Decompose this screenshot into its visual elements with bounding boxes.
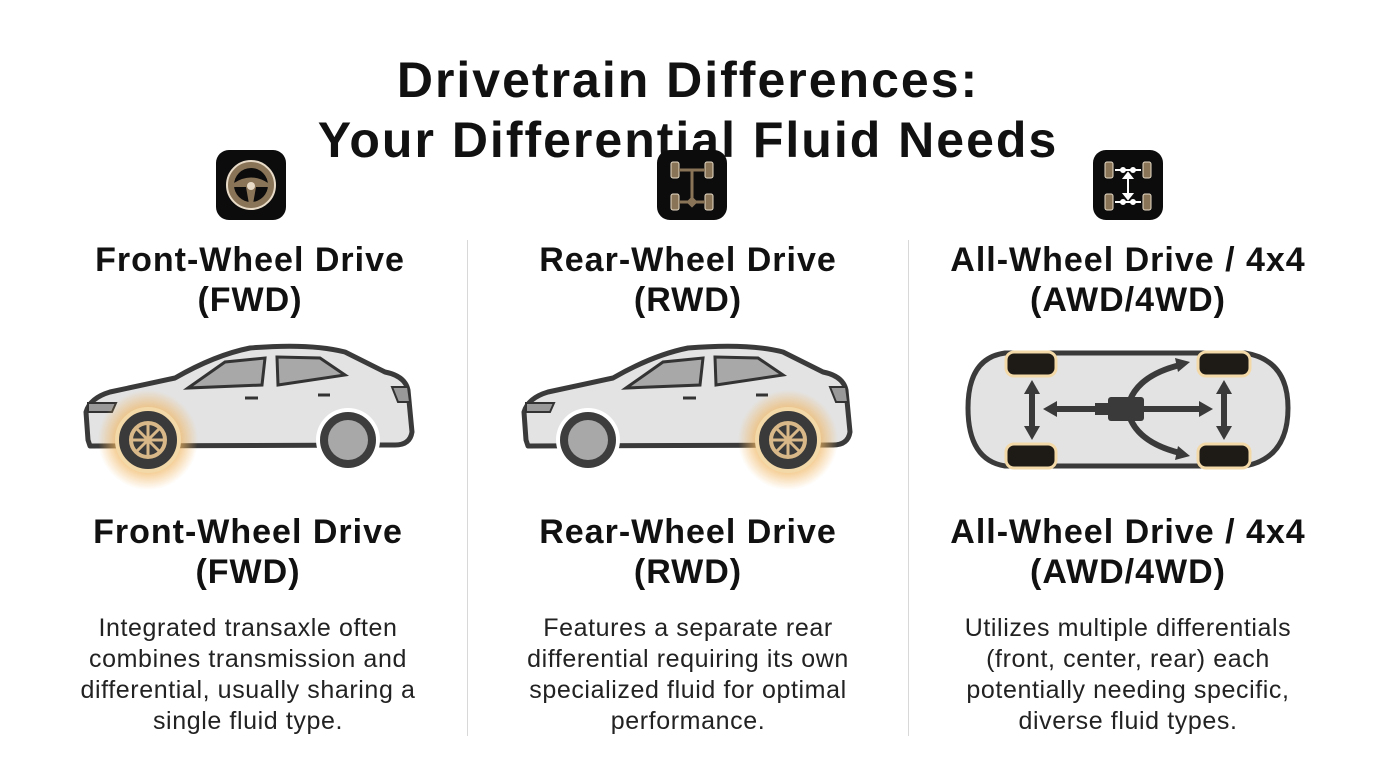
heading: AWD top: All-Wheel Drive / 4x4 bbox=[950, 241, 1306, 279]
icon: steering wheel bbox=[216, 150, 286, 220]
icon: awd chassis bbox=[1093, 150, 1163, 220]
text: AWD description: diverse fluid types. bbox=[1018, 707, 1238, 735]
heading: RWD top: (RWD) bbox=[634, 281, 742, 319]
text: FWD description: differential, usually sharing a bbox=[80, 676, 416, 704]
car: AWD top view bbox=[968, 352, 1288, 468]
heading: RWD bottom: (RWD) bbox=[634, 553, 742, 591]
icon: rwd chassis bbox=[657, 150, 727, 220]
heading: RWD bottom bbox=[539, 513, 837, 591]
text: AWD description: potentially needing specific, bbox=[966, 676, 1290, 704]
car: RWD bbox=[524, 346, 850, 490]
heading: FWD top bbox=[95, 241, 405, 319]
heading: FWD bottom bbox=[93, 513, 403, 591]
car: FWD bbox=[86, 346, 412, 490]
heading: RWD bottom: Rear-Wheel Drive bbox=[539, 513, 837, 551]
title: Drivetrain Differences: bbox=[397, 52, 979, 108]
heading: AWD bottom: All-Wheel Drive / 4x4 bbox=[950, 513, 1306, 551]
heading: FWD bottom: (FWD) bbox=[195, 553, 301, 591]
divider left bbox=[467, 240, 468, 736]
text: FWD description: single fluid type. bbox=[153, 707, 343, 735]
text: FWD description: Integrated transaxle often bbox=[98, 614, 398, 642]
heading: FWD top: (FWD) bbox=[197, 281, 303, 319]
title: Your Differential Fluid Needs bbox=[318, 112, 1058, 168]
text: AWD description: (front, center, rear) each bbox=[986, 645, 1270, 673]
title bbox=[318, 52, 1058, 168]
heading: FWD top: Front-Wheel Drive bbox=[95, 241, 405, 279]
text: RWD description: differential requiring its own bbox=[527, 645, 849, 673]
text: RWD description: specialized fluid for optimal bbox=[529, 676, 847, 704]
heading: AWD bottom: (AWD/4WD) bbox=[1030, 553, 1226, 591]
text: FWD description bbox=[80, 614, 416, 735]
heading: AWD top: (AWD/4WD) bbox=[1030, 281, 1226, 319]
heading: AWD bottom bbox=[950, 513, 1306, 591]
text: AWD description bbox=[965, 614, 1291, 735]
heading: RWD top: Rear-Wheel Drive bbox=[539, 241, 837, 279]
text: RWD description: Features a separate rear bbox=[543, 614, 833, 642]
heading: AWD top bbox=[950, 241, 1306, 319]
text: FWD description: combines transmission and bbox=[89, 645, 407, 673]
divider right bbox=[908, 240, 909, 736]
text: AWD description: Utilizes multiple differentials bbox=[965, 614, 1291, 642]
heading: RWD top bbox=[539, 241, 837, 319]
text: RWD description: performance. bbox=[611, 707, 765, 735]
text: RWD description bbox=[527, 614, 849, 735]
heading: FWD bottom: Front-Wheel Drive bbox=[93, 513, 403, 551]
